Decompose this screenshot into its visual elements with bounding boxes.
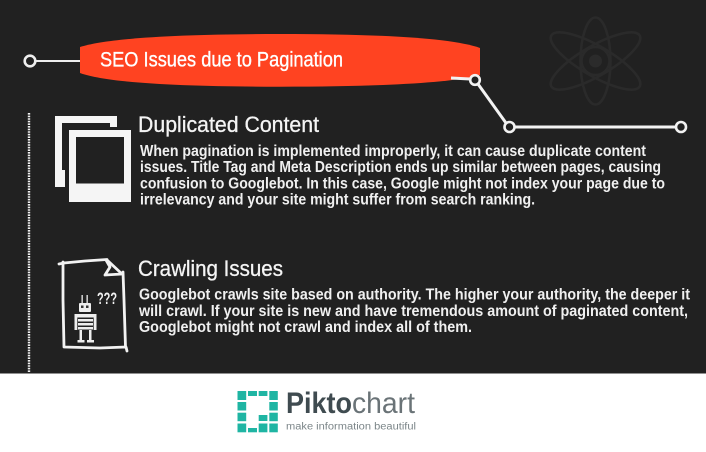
- heading: crawling issues: Crawling Issues: [138, 256, 283, 281]
- tagline: make information beautiful: [286, 422, 416, 432]
- left connector: [25, 56, 80, 66]
- piktochart logo: [238, 387, 416, 432]
- icon: logo mark: [238, 391, 278, 432]
- dotted vertical line: [28, 113, 30, 373]
- text: duplicated content body: When pagination is implemented improperly, it can cause duplicate content: [140, 143, 647, 160]
- right connector: [451, 75, 686, 132]
- text: duplicated content body: [140, 143, 665, 208]
- icon: atom watermark: [544, 18, 647, 104]
- icon: robot: [74, 295, 96, 342]
- text: crawling issues body: [138, 286, 691, 336]
- text: duplicated content body: irrelevancy and your site might suffer from search ranking.: [140, 192, 535, 208]
- text: crawling issues body: Googlebot might not crawl and index all of them.: [139, 319, 472, 336]
- piktochart logo: chart: [352, 387, 416, 420]
- title banner: [80, 34, 480, 87]
- wordmark: Pikto: [286, 387, 352, 420]
- question marks: ???: [97, 290, 117, 308]
- heading: duplicated content: Duplicated Content: [138, 112, 320, 137]
- icon: document with robot: [59, 260, 127, 351]
- title: SEO Issues due to Pagination: [100, 48, 343, 72]
- icon: duplicated pages: [55, 116, 131, 202]
